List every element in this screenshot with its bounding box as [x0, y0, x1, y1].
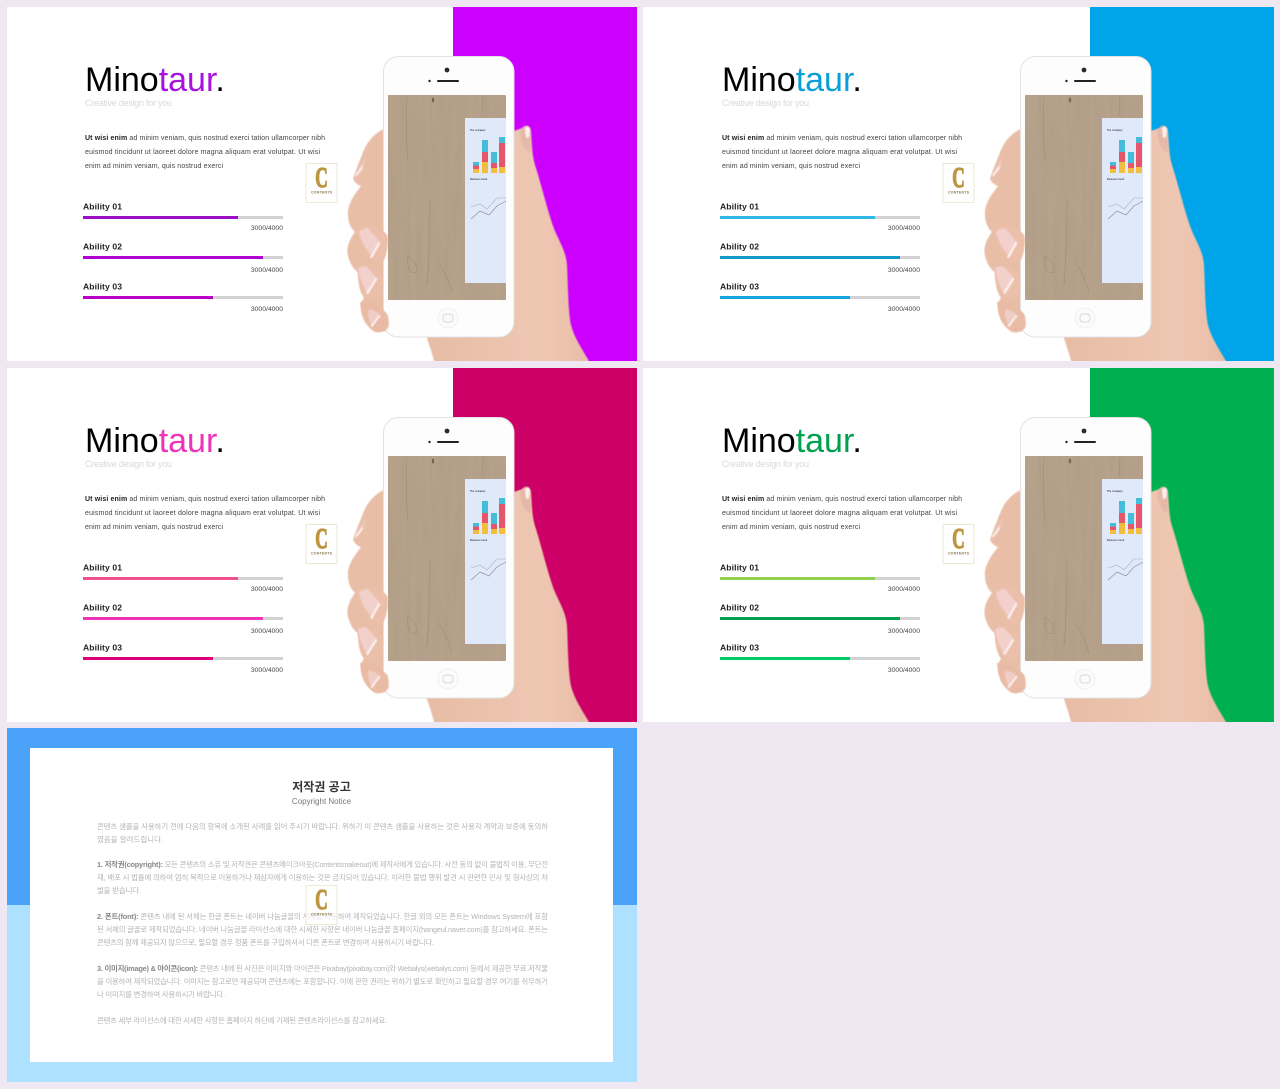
logo	[306, 524, 337, 564]
chart labels: The company	[470, 129, 486, 132]
bar: ability 03: 3000/4000	[888, 667, 920, 674]
body text	[85, 496, 325, 531]
logo: CONTENTS	[311, 190, 333, 194]
body text: Ut wisi enim ad minim veniam, quis nostrud exerci tation ullamcorper nibh	[85, 135, 325, 142]
colour band	[453, 7, 637, 361]
section 2 font: 2. 폰트(font): 콘텐츠 내에 된 서체는 한글 폰트는 네이버 나눔글꼴의 서체를 사용하여 제작되었습니다. 한글 외의 모든 폰트는 Windows System에 포함	[97, 912, 548, 921]
bar: ability 02	[83, 242, 283, 274]
body text: euismod tincidunt ut laoreet dolore magna aliquam erat volutpat. Ut wisi	[85, 510, 320, 517]
body text: Ut wisi enim ad minim veniam, quis nostrud exerci tation ullamcorper nibh	[722, 135, 962, 142]
body text: euismod tincidunt ut laoreet dolore magna aliquam erat volutpat. Ut wisi	[722, 510, 957, 517]
bar: ability 03: Ability 03	[720, 642, 759, 652]
panel: slide purple	[7, 7, 637, 368]
logo: C	[315, 524, 328, 555]
phone in hand	[347, 418, 593, 729]
subtitle: Creative design for you	[85, 98, 172, 108]
intro paragraph: 콘텐츠 샘플을 사용하기 전에 다음의 항목에 소개된 사례를 읽어 주시기 바랍니다. 위하기 이 콘텐츠 샘플을 사용하는 것은 사용자 계약과 보증에 동의하	[97, 822, 548, 831]
subtitle: Creative design for you	[722, 459, 809, 469]
phone in hand	[984, 418, 1230, 729]
body text	[722, 496, 962, 531]
bar: ability 02: 3000/4000	[251, 267, 283, 274]
bar: ability 01: Ability 01	[720, 562, 759, 572]
bar: ability 02: Ability 02	[720, 242, 759, 252]
chart labels: The company	[1107, 129, 1123, 132]
bar: ability 01	[83, 562, 283, 593]
bar: ability 01: Ability 01	[720, 202, 759, 212]
title: Minotaur.	[722, 61, 862, 99]
section 2 font	[97, 912, 548, 947]
body text: enim ad minim veniam, quis nostrud exerci	[85, 163, 223, 170]
notice title: 저작권 공고	[292, 779, 351, 794]
chart labels: The company	[470, 490, 486, 493]
section 3 image and icon: 3. 이미지(image) & 아이콘(icon): 콘텐츠 내에 된 사진은 이미지와 아이콘은 Pixabay(pixabay.com)와 Webalys(webalys.com) 등에서 제공한 무료 저작물	[97, 964, 548, 973]
chart labels	[1107, 129, 1125, 181]
logo: CONTENTS	[948, 552, 970, 556]
section 3 image and icon: 을 이용하여 제작되었습니다. 이미지는 참고로만 제공되며 콘텐츠에는 포함합니다. 이에 관한 권리는 위하기 별도로 확인하고 필요할 경우 여기를 쉬무하거	[97, 977, 548, 986]
subtitle: Creative design for you	[85, 459, 172, 469]
chart labels	[470, 490, 488, 542]
bar: ability 03	[720, 642, 920, 674]
bar: ability 01: 3000/4000	[888, 225, 920, 232]
bar: ability 03: 3000/4000	[888, 306, 920, 313]
section 1 copyright	[97, 860, 548, 895]
bar: ability 01	[720, 562, 920, 593]
bar: ability 02: 3000/4000	[888, 267, 920, 274]
logo	[306, 163, 337, 202]
bar: ability 01: 3000/4000	[251, 225, 283, 232]
colour band	[1090, 7, 1274, 361]
bar: ability 01: Ability 01	[83, 202, 122, 212]
chart labels: Business trend	[470, 178, 488, 181]
panel: slide magenta	[7, 368, 637, 729]
body text: euismod tincidunt ut laoreet dolore magna aliquam erat volutpat. Ut wisi	[85, 149, 320, 156]
chart labels	[470, 129, 488, 181]
section 1 copyright: 벌을 받습니다.	[97, 886, 141, 895]
phone in hand	[984, 56, 1230, 368]
panel: slide green	[643, 368, 1274, 729]
bar: ability 02: Ability 02	[83, 242, 122, 252]
closing line: 콘텐츠 세부 라이선스에 대한 시세한 사항은 홈페이지 하단에 기재된 콘텐츠라이선스를 참고하세요.	[97, 1016, 387, 1025]
logo: CONTENTS	[948, 190, 970, 194]
body text: Ut wisi enim ad minim veniam, quis nostrud exerci tation ullamcorper nibh	[85, 496, 325, 503]
bar: ability 02: Ability 02	[83, 602, 122, 612]
body text: enim ad minim veniam, quis nostrud exerci	[722, 524, 860, 531]
colour band	[1090, 368, 1274, 722]
body text: Ut wisi enim ad minim veniam, quis nostrud exerci tation ullamcorper nibh	[722, 496, 962, 503]
intro paragraph	[97, 822, 548, 844]
body text: euismod tincidunt ut laoreet dolore magna aliquam erat volutpat. Ut wisi	[722, 149, 957, 156]
title: Minotaur.	[85, 422, 225, 460]
logo: CONTENTS	[311, 912, 333, 916]
body text: enim ad minim veniam, quis nostrud exerci	[722, 163, 860, 170]
bar: ability 03	[83, 642, 283, 674]
bar: ability 03: Ability 03	[83, 282, 122, 292]
logo: C	[952, 163, 965, 194]
phone in hand	[347, 56, 593, 368]
subtitle: Creative design for you	[722, 98, 809, 108]
bar: ability 01: 3000/4000	[888, 586, 920, 593]
bar: ability 03: Ability 03	[83, 642, 122, 652]
section 1 copyright: 재, 배포 시 법률에 의하여 엄히 목적으로 이용하거나 제삼자에게 이용하는 것은 금지되어 있습니다. 이러한 불법 행위 발견 시 관련한 민사 및 형사상의 처	[97, 873, 548, 882]
bar: ability 03: Ability 03	[720, 282, 759, 292]
chart labels: Business trend	[1107, 178, 1125, 181]
bar: ability 02	[720, 602, 920, 635]
intro paragraph: 였음을 알려드립니다.	[97, 835, 163, 844]
notice subtitle: Copyright Notice	[292, 797, 352, 806]
panel: copyright notice	[7, 728, 637, 1082]
logo	[943, 524, 974, 564]
logo: CONTENTS	[311, 552, 333, 556]
logo: C	[315, 163, 328, 194]
title: Minotaur.	[722, 422, 862, 460]
chart labels	[1107, 490, 1125, 542]
chart labels: Business trend	[1107, 539, 1125, 542]
body text	[85, 135, 325, 170]
title: Minotaur.	[85, 61, 225, 99]
bar: ability 03	[720, 282, 920, 313]
panel: slide blue	[643, 7, 1274, 368]
bar: ability 02	[83, 602, 283, 635]
section 3 image and icon	[97, 964, 548, 999]
bar: ability 02	[720, 242, 920, 274]
bar: ability 02: 3000/4000	[251, 628, 283, 635]
chart labels: Business trend	[470, 539, 488, 542]
logo	[943, 163, 974, 202]
section 3 image and icon: 나 이미지를 변경하여 사용하시기 바랍니다.	[97, 990, 225, 999]
logo: C	[952, 524, 965, 555]
section 2 font: 된 서체의 글꼴로 제작되었습니다. 네이버 나눔글꼴 라이선스에 대한 시세한 사항은 네이버 나눔글꼴 홈페이지(hangeul.naver.com)를 참고하세요. 폰트는	[97, 925, 548, 934]
bar: ability 02: Ability 02	[720, 602, 759, 612]
section 1 copyright: 1. 저작권(copyright): 모든 콘텐츠의 소유 및 저작권은 콘텐츠메이크아웃(Contentsmakeout)에 제작사에게 있습니다. 사전 동의 없이 불법적 이용, 무단전	[97, 860, 548, 869]
body text	[722, 135, 962, 170]
logo: C	[315, 885, 328, 916]
body text: enim ad minim veniam, quis nostrud exerci	[85, 524, 223, 531]
bar: ability 01: 3000/4000	[251, 586, 283, 593]
bar: ability 02: 3000/4000	[888, 628, 920, 635]
bar: ability 01: Ability 01	[83, 562, 122, 572]
logo	[306, 885, 337, 924]
bar: ability 01	[83, 202, 283, 232]
bar: ability 03: 3000/4000	[251, 667, 283, 674]
chart labels: The company	[1107, 490, 1123, 493]
bar: ability 03	[83, 282, 283, 313]
bar: ability 03: 3000/4000	[251, 306, 283, 313]
colour band	[453, 368, 637, 722]
section 2 font: 콘텐츠의 함께 제공되지 않으므로, 필요할 경우 정품 폰트를 구입하셔서 다른 폰트로 변경하여 사용하시기 바랍니다.	[97, 938, 434, 947]
bar: ability 01	[720, 202, 920, 232]
